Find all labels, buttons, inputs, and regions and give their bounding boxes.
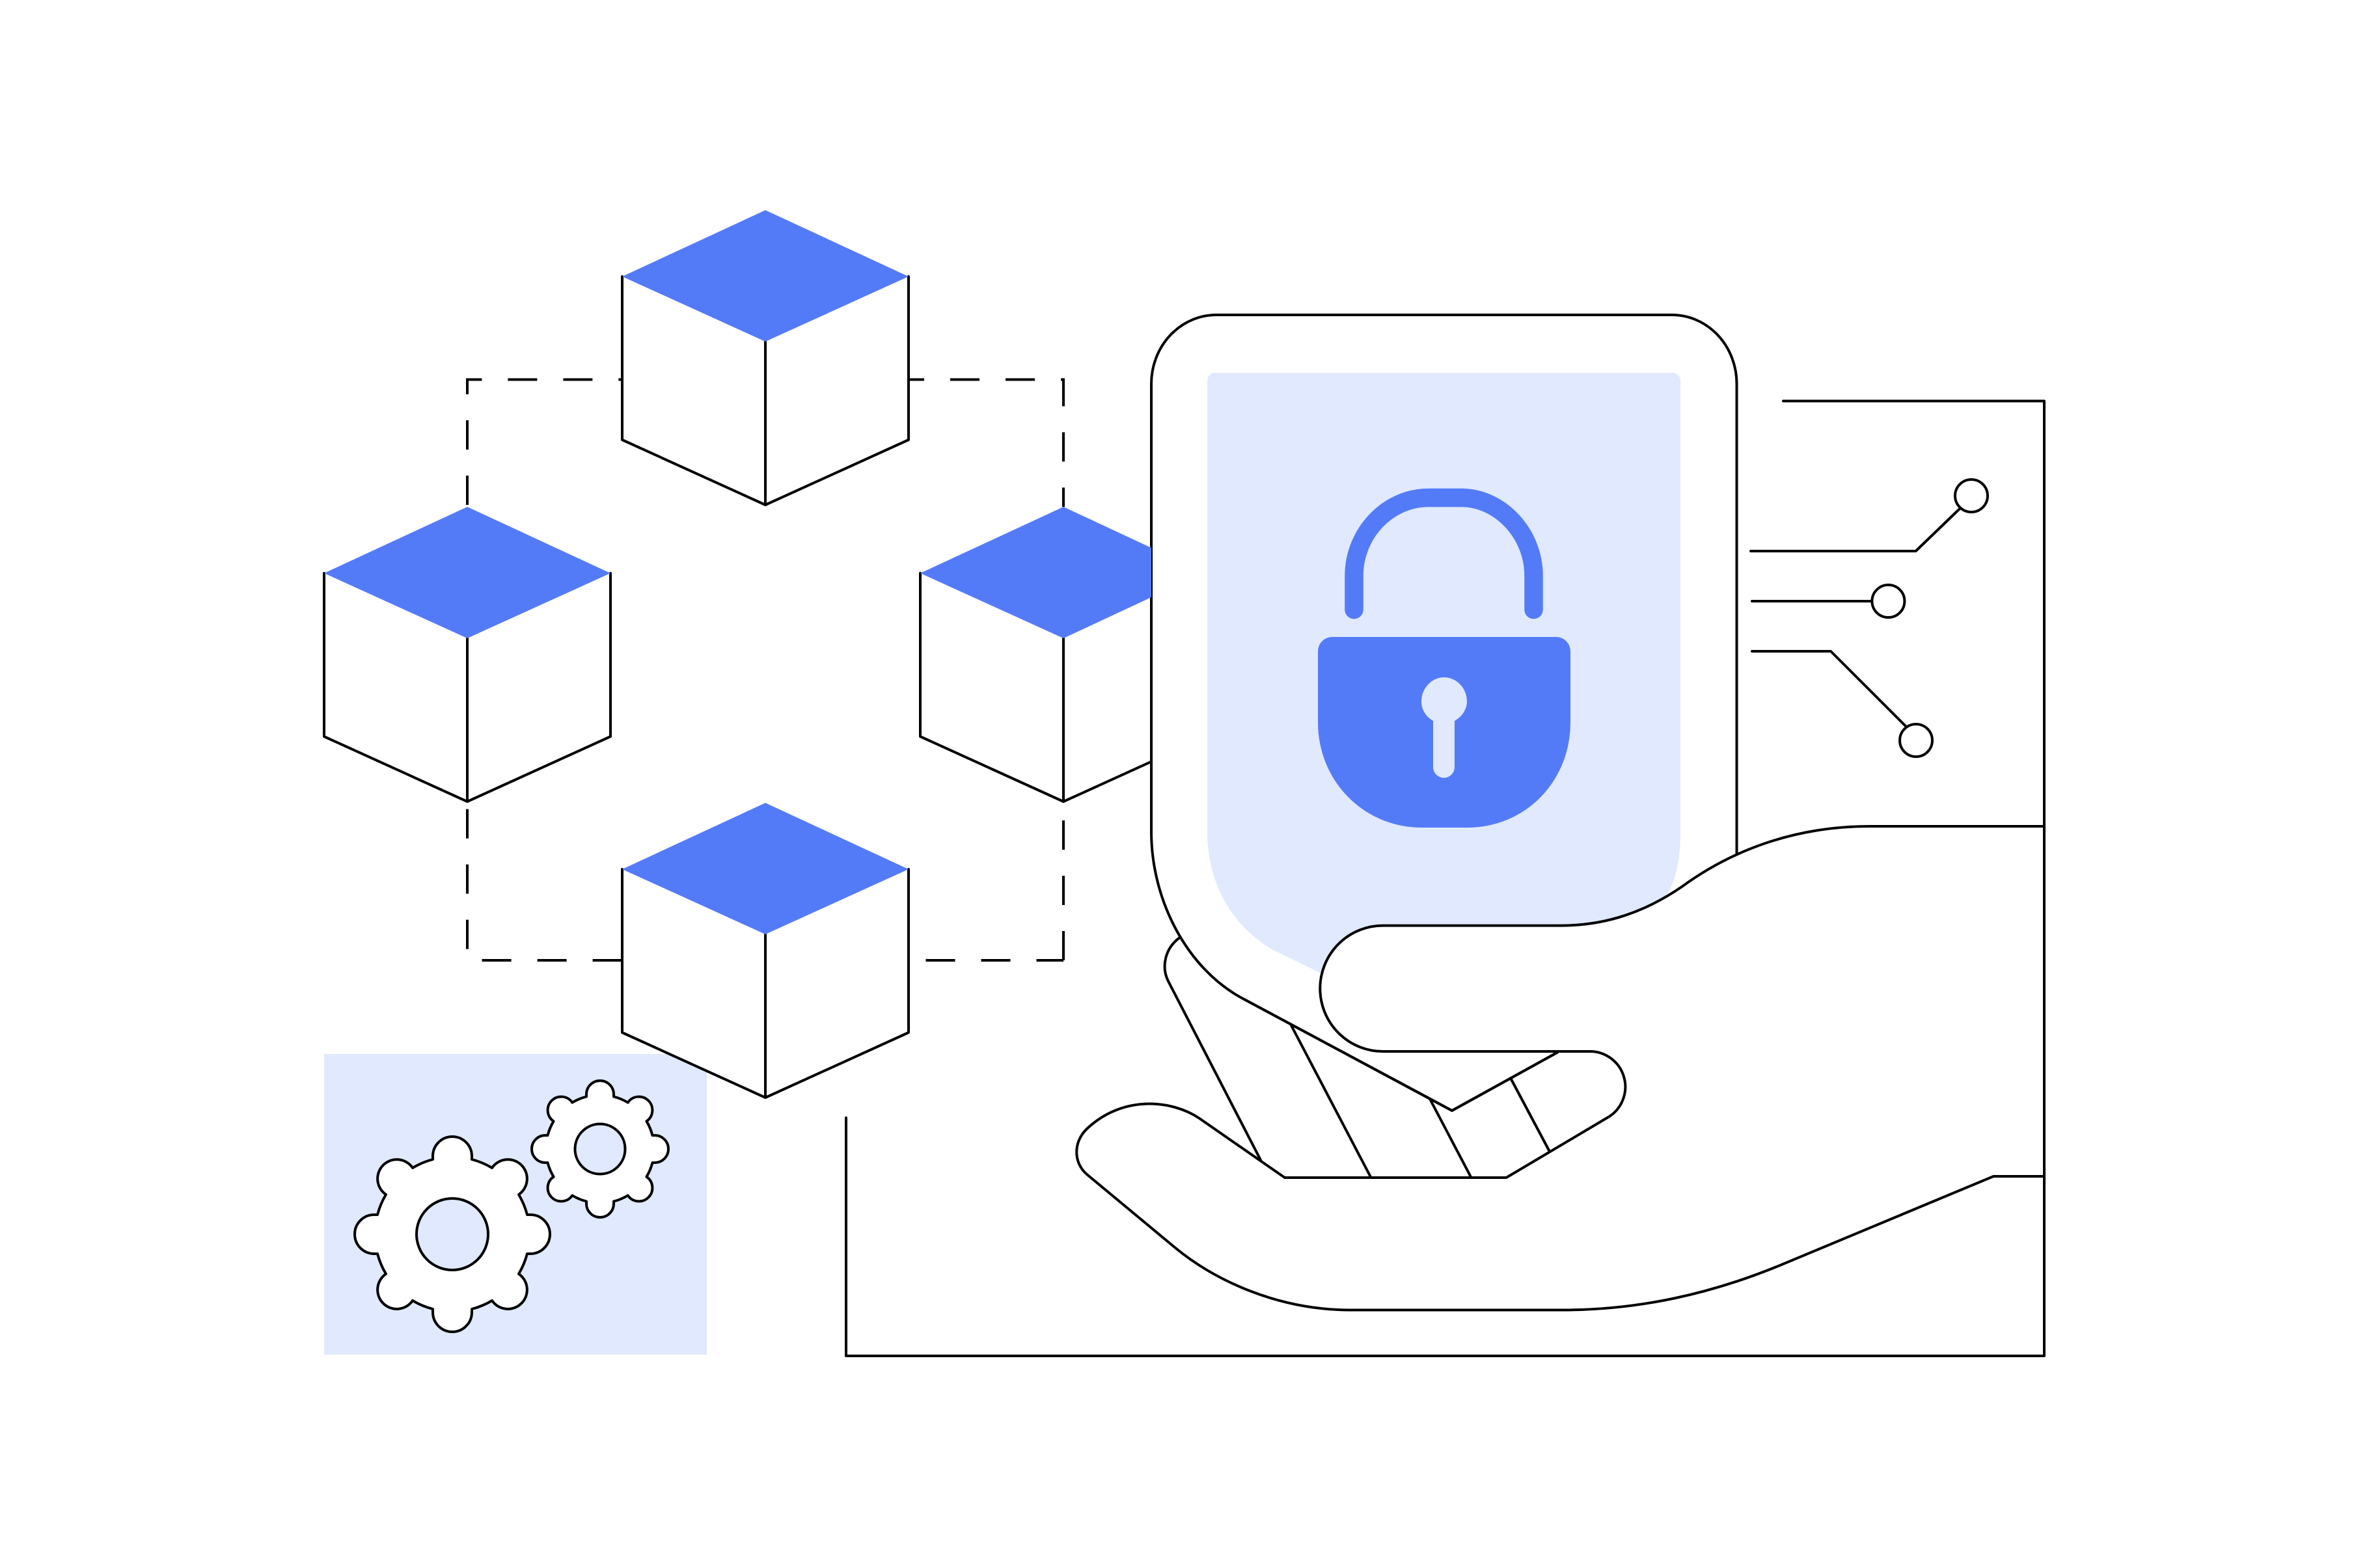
icon: large gear: [355, 1137, 550, 1332]
panel: phone: [1151, 315, 1736, 1111]
circuit: upper node: [1751, 480, 1988, 551]
icon: top block: [622, 210, 909, 505]
phone screen: [1207, 373, 1680, 976]
padlock keyhole: [1421, 677, 1467, 778]
icon: right block: [920, 573, 1207, 802]
circuit lines with nodes: [1751, 480, 1988, 757]
dashed connectors between blocks: [467, 379, 1063, 960]
hand: back finger: [1165, 938, 1261, 1160]
hand: finger separator lines: [1243, 999, 1557, 1177]
frame: outer background line: [846, 401, 2044, 1356]
icon: small gear: [532, 1081, 668, 1217]
hand: palm and thumb: [1076, 826, 2044, 1310]
icon: bottom block: [622, 803, 909, 1098]
padlock body: [1318, 637, 1570, 828]
panel: gears background: [324, 1054, 707, 1355]
icon: left block: [324, 507, 610, 802]
circuit: middle node: [1752, 585, 1904, 617]
phone body: [1151, 315, 1736, 1111]
circuit: lower node: [1752, 651, 1932, 757]
icon: padlock: [1318, 498, 1570, 828]
padlock shackle: [1354, 498, 1533, 610]
right block top face overlapping phone edge: [920, 507, 1151, 638]
